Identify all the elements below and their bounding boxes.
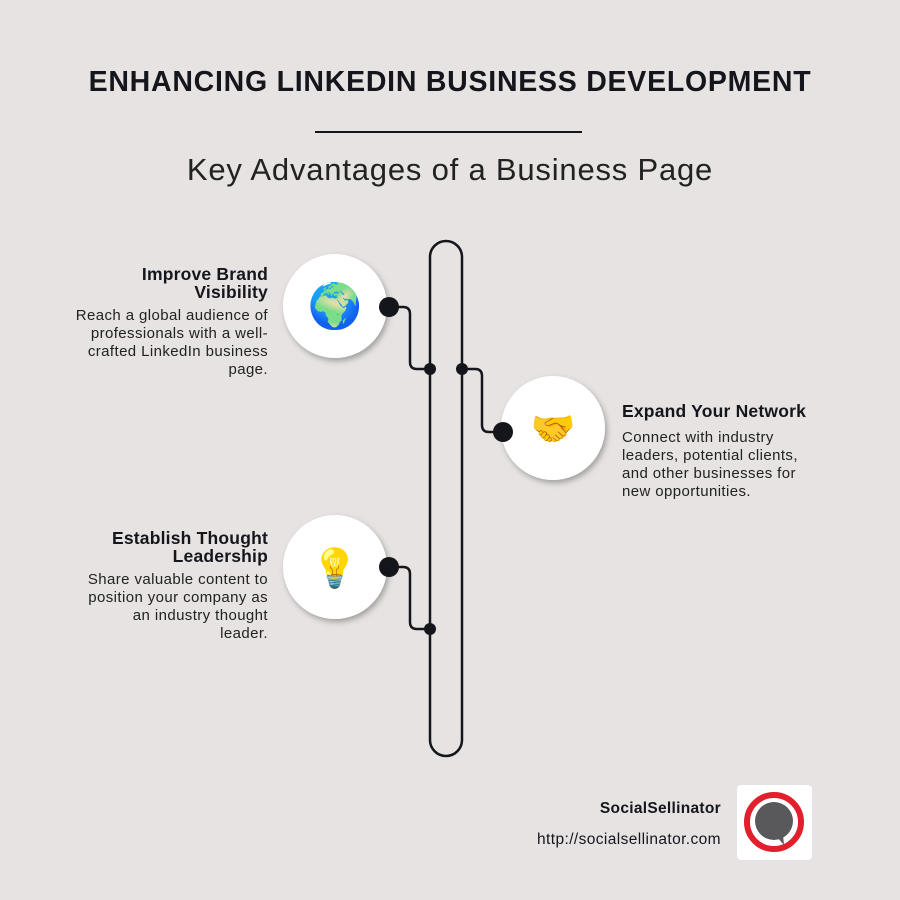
text: expand network: Expand Your Network xyxy=(622,401,806,421)
title: ENHANCING LINKEDIN BUSINESS DEVELOPMENT xyxy=(89,66,811,98)
brand name: SocialSellinator xyxy=(600,800,721,817)
text: improve brand visibility: Reach a global audience of professionals with a well-crafted LinkedIn business page. xyxy=(76,307,268,378)
text: thought leadership xyxy=(88,528,268,642)
circle: handshake xyxy=(501,376,605,480)
circle: globe: 🌍 xyxy=(308,281,362,331)
text: thought leadership: position your company as xyxy=(88,589,268,606)
circle: handshake: 🤝 xyxy=(531,408,575,449)
text: thought leadership: an industry thought xyxy=(133,607,268,624)
text: expand network xyxy=(622,401,806,500)
track xyxy=(430,241,462,756)
text: expand network: Connect with industry xyxy=(622,429,774,446)
text: thought leadership: Establish Thought xyxy=(112,528,268,548)
text: thought leadership: Leadership xyxy=(173,546,268,566)
circle: bulb: 💡 xyxy=(311,546,359,590)
circle: globe xyxy=(283,254,387,358)
subtitle: Key Advantages of a Business Page xyxy=(187,152,713,187)
text: improve brand visibility xyxy=(76,264,268,378)
logo xyxy=(737,785,812,860)
text: thought leadership: Share valuable content to xyxy=(88,571,268,588)
text: thought leadership: leader. xyxy=(220,625,268,642)
text: expand network: and other businesses for xyxy=(622,465,796,482)
circle: bulb xyxy=(283,515,387,619)
text: expand network: leaders, potential clients, xyxy=(622,447,798,464)
text: improve brand visibility: Improve Brand xyxy=(142,264,268,284)
connectors xyxy=(389,307,503,629)
url: http://socialsellinator.com xyxy=(537,831,721,848)
text: expand network: new opportunities. xyxy=(622,483,751,500)
text: improve brand visibility: Visibility xyxy=(194,282,268,302)
